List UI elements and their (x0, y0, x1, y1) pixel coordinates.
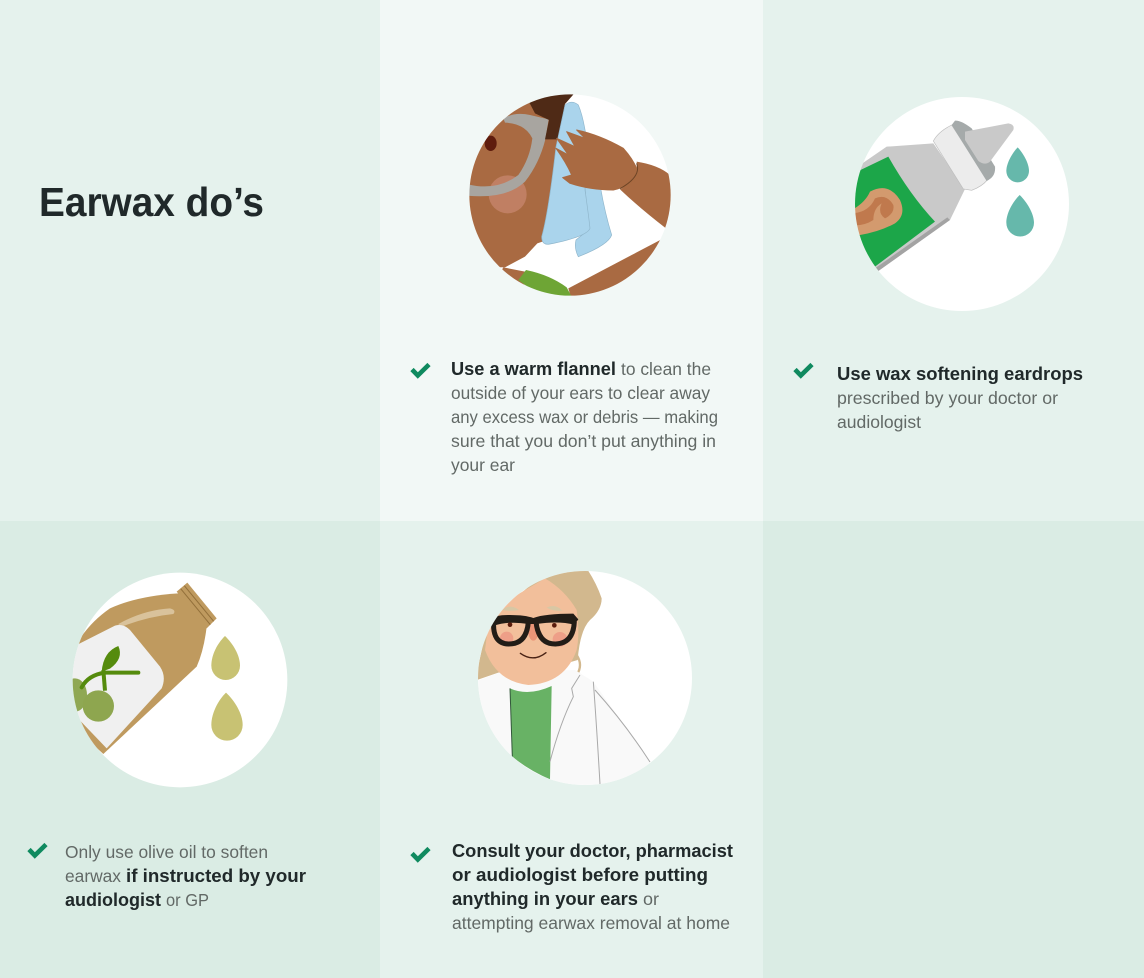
glasses lenses (494, 622, 574, 644)
nozzle (965, 123, 1014, 164)
cheeks (500, 632, 513, 645)
panel: empty background (763, 521, 1144, 978)
text: eardrops: Use wax softening eardrops (837, 364, 1083, 384)
illustration: doctor (475, 568, 692, 793)
illustration: washing with a flannel (463, 93, 673, 300)
text: olive oil: earwax (65, 866, 121, 886)
panel: title background (0, 0, 380, 521)
ear inner (856, 197, 894, 226)
eyebrows (502, 606, 562, 611)
text: consult: or audiologist before putting (452, 865, 708, 885)
lower skin left (483, 267, 540, 300)
text: warm flannel: sure that you don’t put anything in (451, 431, 716, 451)
coat (475, 670, 650, 793)
title: Earwax do’s (39, 179, 264, 225)
hand crease (620, 163, 638, 189)
tube body (860, 143, 965, 271)
illustration: eardrops (850, 97, 1069, 311)
head and neck skin (469, 102, 558, 268)
drop upper (1006, 147, 1029, 182)
text: consult (452, 841, 733, 933)
text: warm flannel: any excess wax or debris — making (451, 407, 718, 427)
glasses arm (467, 114, 549, 196)
glasses top bar (491, 614, 578, 626)
illustration: olive oil bottle (63, 573, 287, 787)
coat lines (550, 675, 650, 784)
panel: consult background (380, 521, 763, 978)
bottle (70, 593, 207, 754)
text: olive oil (65, 842, 306, 910)
cap ring (952, 121, 995, 181)
back towel (575, 187, 612, 257)
cap (933, 125, 987, 190)
eyes (508, 622, 512, 627)
arm (620, 162, 673, 228)
hair strand (577, 655, 580, 675)
stem (103, 670, 105, 691)
text: consult: or (643, 889, 659, 909)
text: olive oil: Only use olive oil to soften (65, 842, 268, 862)
green strap (518, 270, 571, 296)
check: consult (412, 848, 429, 860)
text: olive oil: or GP (166, 890, 209, 910)
text: warm flannel: to clean the (621, 359, 711, 379)
lower skin right (568, 240, 660, 296)
ear mole (485, 136, 497, 151)
check: olive oil (29, 844, 46, 856)
shirt shadow (510, 688, 512, 757)
drop upper (211, 636, 240, 680)
panel: olive oil background (0, 521, 380, 978)
hair (475, 568, 602, 681)
text: consult: attempting earwax removal at home (452, 913, 730, 933)
hand (556, 130, 638, 190)
olive front (83, 690, 114, 722)
check: eardrops (795, 364, 812, 376)
text: warm flannel: outside of your ears to clear away (451, 383, 710, 403)
text: warm flannel (451, 359, 718, 475)
check: warm flannel (412, 364, 429, 376)
ear outer (850, 188, 902, 235)
olive back (72, 678, 87, 712)
panel: warm flannel background (380, 0, 763, 521)
text: olive oil: if instructed by your (126, 866, 306, 886)
label (70, 625, 164, 748)
text: consult: Consult your doctor, pharmacist (452, 841, 733, 861)
tube shadow (876, 217, 950, 271)
face (485, 578, 578, 685)
green shirt (510, 686, 552, 779)
mouth (520, 653, 546, 658)
nose (528, 623, 538, 641)
text: olive oil: audiologist (65, 890, 161, 910)
text: eardrops: audiologist (837, 412, 921, 432)
branch (82, 673, 138, 687)
leaf (102, 646, 120, 672)
cheek patch (489, 175, 527, 213)
text: warm flannel: your ear (451, 455, 515, 475)
drop lower (1006, 195, 1034, 236)
green label (850, 157, 935, 267)
panel: eardrops background (763, 0, 1144, 521)
neck ridges (181, 586, 214, 625)
text: consult: anything in your ears (452, 889, 638, 909)
front towel (542, 102, 590, 244)
text: eardrops: prescribed by your doctor or (837, 388, 1058, 408)
hair (528, 93, 575, 139)
text: warm flannel: Use a warm flannel (451, 359, 616, 379)
drop lower (211, 693, 243, 741)
text: eardrops (837, 364, 1083, 432)
highlight (118, 608, 174, 627)
bottle neck (177, 583, 217, 628)
